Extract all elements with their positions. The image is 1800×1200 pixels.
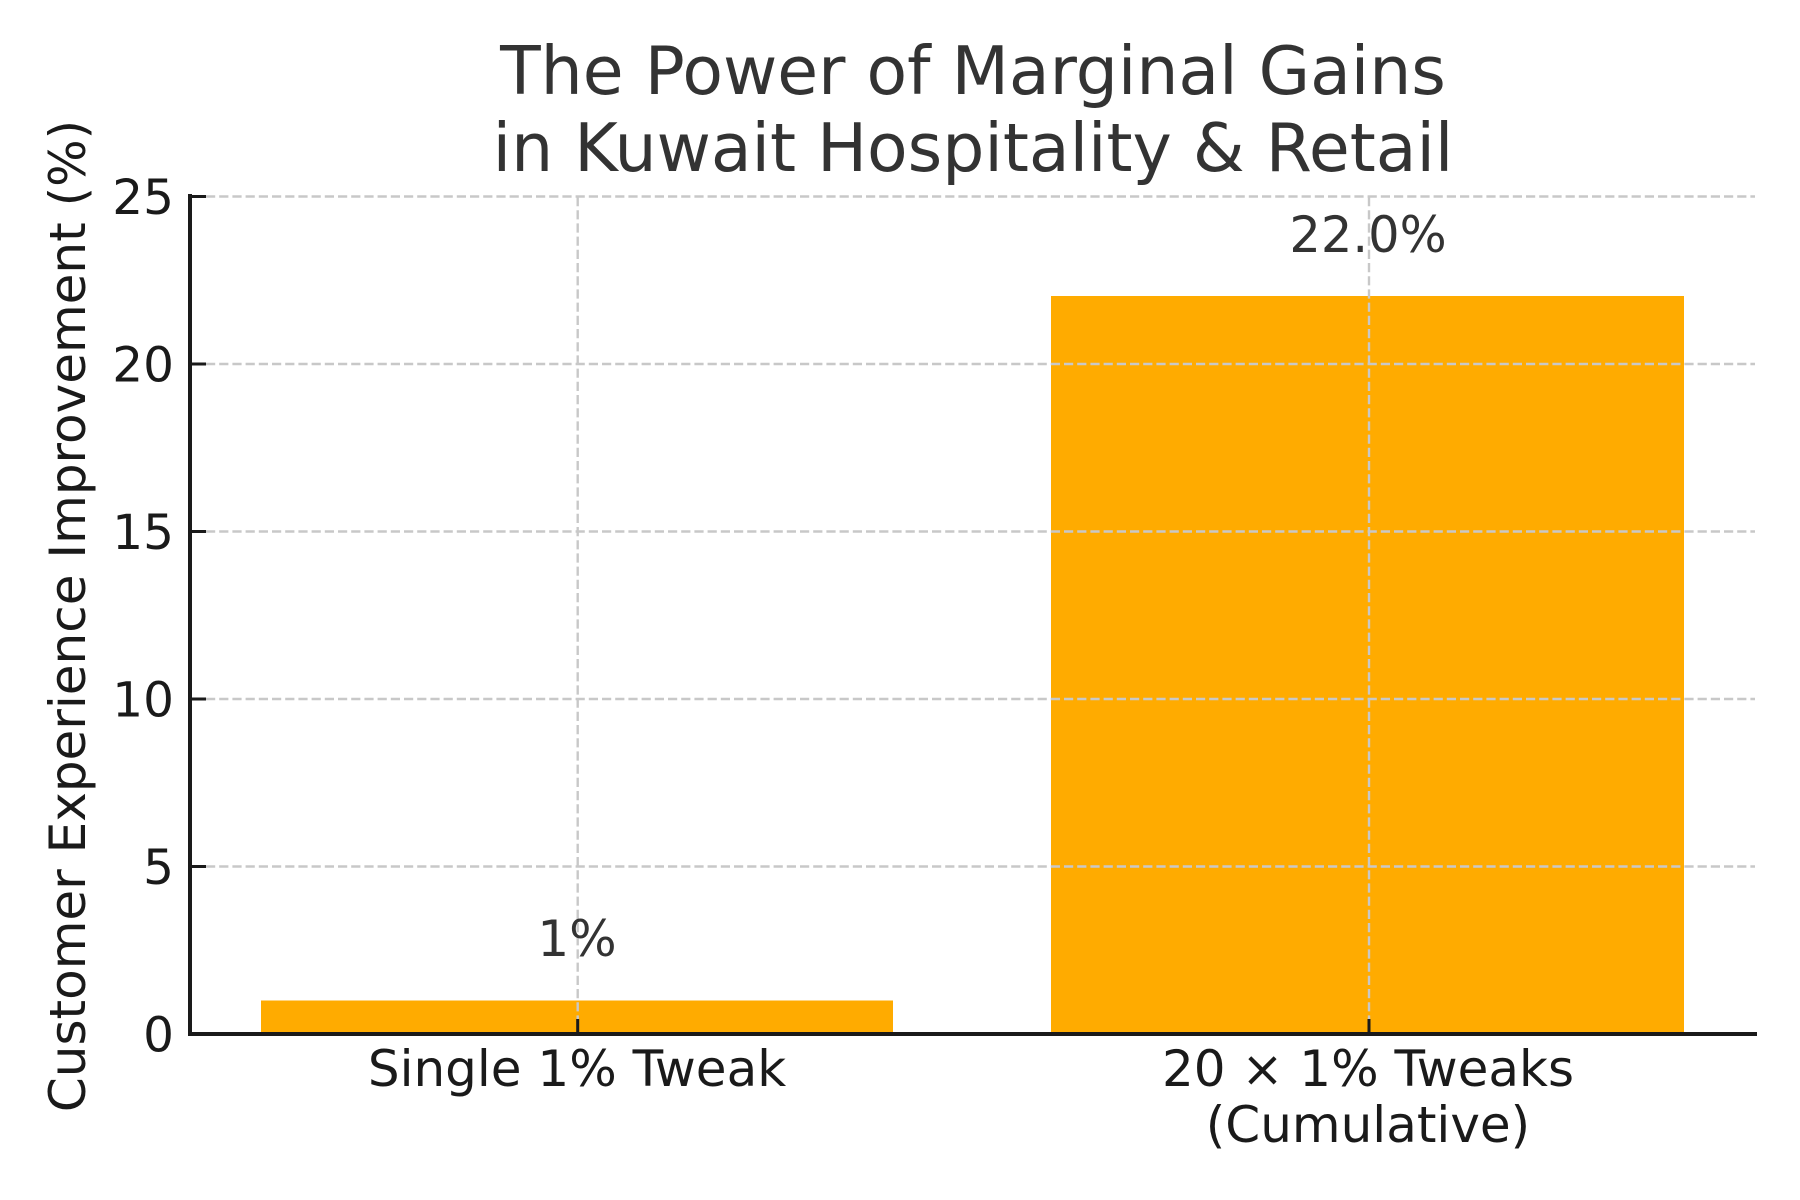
data label: 1%: 1%	[537, 910, 617, 968]
y-axis title: Customer Experience Improvement (%)	[39, 120, 97, 1112]
y-axis tick labels: 0	[143, 1008, 174, 1064]
data label: 22.0%: 22.0%	[1289, 206, 1447, 264]
bar: 20 x 1% tweaks cumulative	[1051, 296, 1684, 1034]
x-axis label: cumulative tweaks: (Cumulative)	[1206, 1096, 1530, 1154]
y-axis tick labels: 25	[112, 170, 174, 226]
title: in Kuwait Hospitality & Retail	[493, 109, 1453, 187]
x-axis label: cumulative tweaks: 20 × 1% Tweaks	[1162, 1040, 1574, 1098]
bar: single 1% tweak	[261, 1000, 893, 1034]
y-axis tick labels	[112, 170, 174, 1064]
title	[493, 32, 1453, 187]
x-axis label: cumulative tweaks	[1162, 1040, 1574, 1154]
y-axis tick labels: 10	[112, 672, 174, 728]
axes and tick marks	[188, 194, 1757, 1036]
title: The Power of Marginal Gains	[499, 32, 1446, 110]
bar chart	[112, 170, 1757, 1154]
y-axis tick labels: 20	[112, 338, 174, 394]
y-axis tick labels: 15	[112, 505, 174, 561]
y-axis tick labels: 5	[143, 840, 174, 896]
x-axis label: single tweak: Single 1% Tweak	[368, 1040, 786, 1098]
